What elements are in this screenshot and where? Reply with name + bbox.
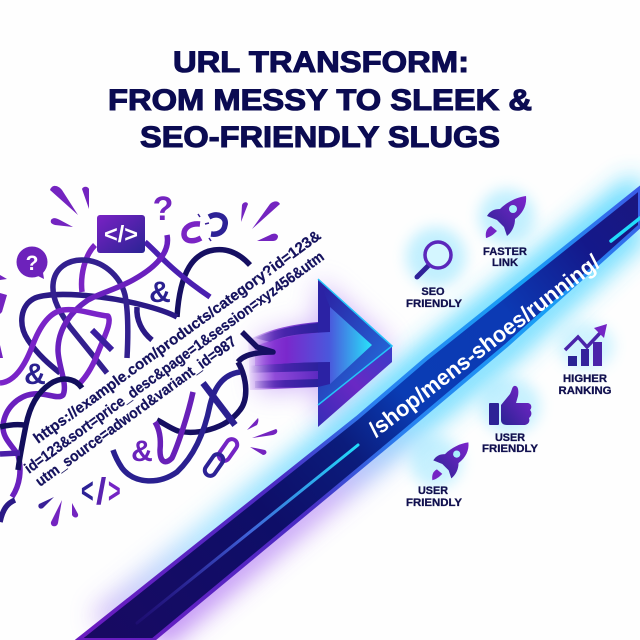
icon: rocket <box>432 442 469 480</box>
ampersand symbols: & <box>131 435 153 468</box>
label: RANKING <box>558 385 612 397</box>
glowing sleek URL band <box>78 186 640 640</box>
label: FRIENDLY <box>406 298 463 310</box>
ampersand symbols <box>24 276 171 468</box>
benefit: SEO friendly <box>406 227 466 310</box>
arrow inner highlight <box>255 307 372 384</box>
label: SEO <box>421 286 445 298</box>
arrow head <box>318 279 392 405</box>
icon: code symbol: < <box>81 471 94 511</box>
icon: chain link <box>203 437 239 478</box>
benefit: user friendly rocket <box>406 436 469 509</box>
icon: code box <box>97 215 145 253</box>
title: SEO-FRIENDLY SLUGS <box>140 121 500 154</box>
chaos spark marks <box>0 186 280 526</box>
icon: code symbol: / <box>96 471 106 512</box>
icon: rocket <box>486 196 526 238</box>
label: HIGHER <box>563 373 607 385</box>
icon: thumbs up <box>489 386 531 425</box>
benefit: higher ranking <box>558 322 614 397</box>
navy curl over arrow <box>238 332 273 362</box>
benefit: faster link <box>479 189 535 269</box>
title <box>108 46 532 154</box>
icon: code box: </> <box>104 221 138 247</box>
icon: question speech bubble <box>16 246 48 279</box>
label: LINK <box>492 257 518 269</box>
arrow shaft dark streaks <box>255 323 330 342</box>
label <box>483 246 527 269</box>
title: FROM MESSY TO SLEEK & <box>108 84 532 117</box>
icon: question mark: ? <box>153 190 173 228</box>
icon: broken link <box>184 214 225 241</box>
glow: soft lavender halo behind arrow <box>258 279 392 427</box>
icon: code symbol <box>81 471 121 512</box>
ampersand symbols: & <box>24 358 46 391</box>
messy URL text: utm_source=adword&variant_id=987 <box>32 333 240 490</box>
label <box>406 485 463 509</box>
arrow 3D side face <box>318 345 392 427</box>
label: FASTER <box>483 246 527 258</box>
arrow shaft base <box>248 322 318 390</box>
label: USER <box>418 485 448 497</box>
clean slug text: /shop/mens-shoes/running/ <box>364 249 605 442</box>
label <box>406 286 463 310</box>
icon: code symbol: > <box>108 471 121 511</box>
label <box>558 373 612 397</box>
benefit: user friendly thumb <box>480 378 540 455</box>
icon: rising chart <box>565 324 607 366</box>
messy URL text: https://example.com/products/category?id=123& <box>30 227 324 447</box>
label: USER <box>495 432 525 444</box>
label: FRIENDLY <box>406 497 463 509</box>
icon: magnifier <box>417 242 451 277</box>
transformation arrow <box>246 279 392 427</box>
messy URL text: id=123&sort=price_desc&page=1&session=xyz456&utm <box>21 248 327 477</box>
title: URL TRANSFORM: <box>173 46 469 79</box>
icon: question speech bubble: ? <box>26 252 38 275</box>
ampersand symbols: & <box>149 276 171 309</box>
label <box>482 432 539 455</box>
label: FRIENDLY <box>482 443 539 455</box>
tangled messy lines <box>0 235 250 522</box>
